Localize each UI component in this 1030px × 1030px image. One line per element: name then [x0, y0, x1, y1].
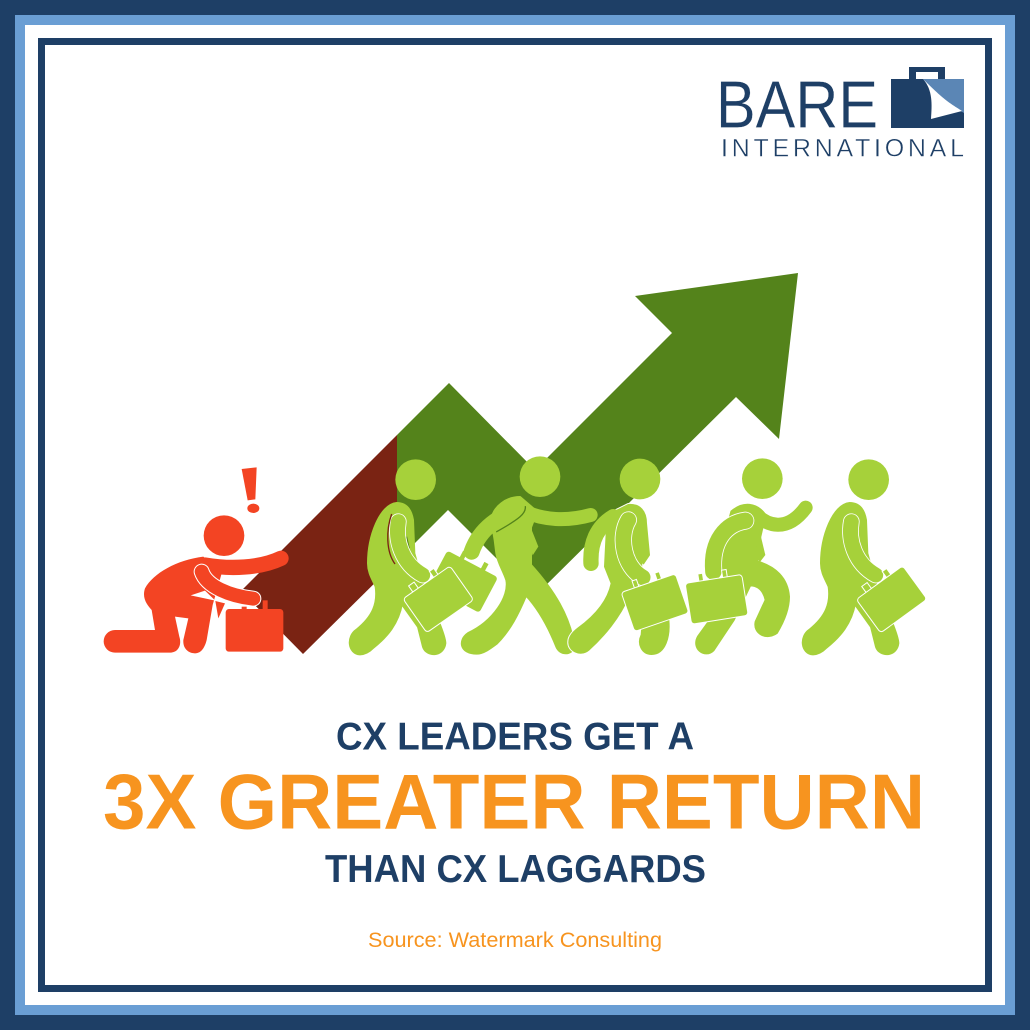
logo wordmark: INTERNATIONAL: INTERNATIONAL [721, 134, 964, 162]
heading line: CX leaders get a: CX LEADERS GET A [336, 716, 694, 758]
figure: green leader 2 [462, 456, 591, 653]
briefcase behind [429, 544, 501, 613]
heading line: 3X greater return: 3X GREATER RETURN [103, 758, 925, 846]
logo: Bare International [716, 67, 964, 162]
figure: struggling red laggard [104, 467, 283, 653]
figure: green leader 5 [803, 459, 927, 654]
arrow: brown section [241, 435, 397, 654]
briefcase front [399, 560, 474, 633]
source note: Source: Watermark Consulting [368, 929, 662, 952]
icon: exclamation mark [242, 467, 259, 513]
logo wordmark: BARE: BARE [716, 68, 878, 142]
figure: green leader 3 [569, 459, 689, 654]
figure: green leader 1 [350, 459, 501, 654]
logo icon: briefcase with page curl [891, 67, 964, 128]
briefcase [852, 560, 927, 633]
arrow: green section [397, 273, 798, 596]
heading line: than CX laggards: THAN CX LAGGARDS [325, 848, 706, 891]
briefcase [619, 567, 689, 632]
growth arrow [241, 273, 798, 654]
briefcase [684, 567, 748, 624]
figure: green leader 4 [684, 458, 806, 653]
